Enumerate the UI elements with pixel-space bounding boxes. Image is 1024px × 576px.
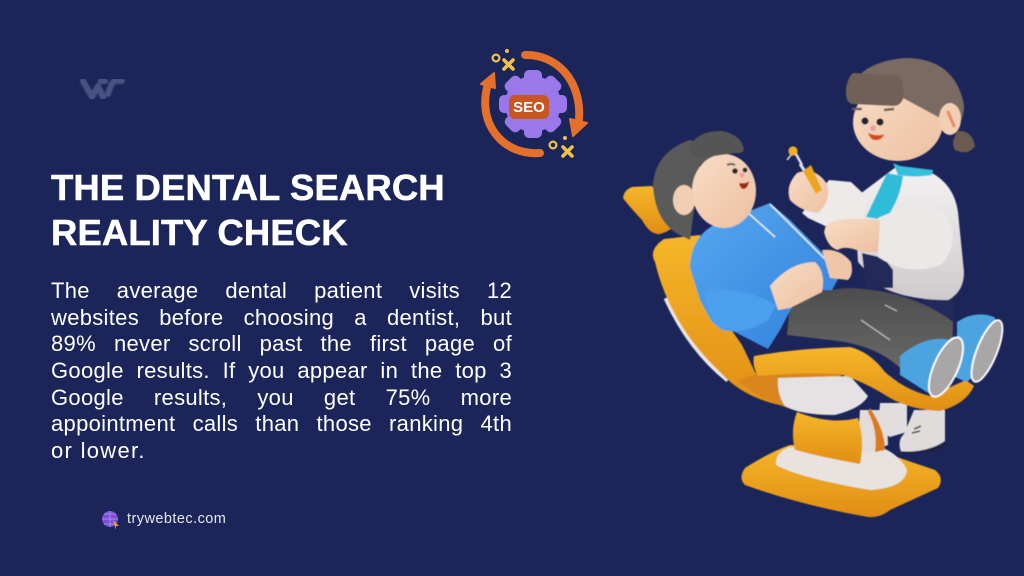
chair column and base bbox=[742, 376, 941, 517]
patient hands bbox=[770, 250, 852, 310]
arrow: clockwise top right bbox=[525, 55, 587, 136]
icon: faint WT logo bbox=[83, 81, 122, 97]
title: THE DENTAL SEARCH bbox=[51, 167, 445, 208]
illustration: dentist treating a patient bbox=[623, 58, 1009, 517]
dentist head bbox=[846, 58, 975, 161]
chair back and headrest bbox=[623, 186, 845, 412]
body text: The average dental patient visits 12 bbox=[51, 278, 512, 303]
website url: trywebtec.com bbox=[127, 511, 226, 527]
body text bbox=[51, 278, 512, 463]
SEO badge: SEO bbox=[513, 99, 545, 116]
body text: Google results, you get 75% more bbox=[51, 385, 512, 410]
patient head bbox=[653, 131, 756, 240]
dentist legs and shoes bbox=[878, 290, 954, 452]
body text: websites before choosing a dentist, but bbox=[51, 305, 512, 330]
icon: SEO gear with circular arrows bbox=[481, 49, 587, 156]
dentist lower arm bbox=[824, 207, 953, 270]
body text: appointment calls than those ranking 4th bbox=[51, 411, 512, 436]
chair seat bbox=[754, 347, 974, 411]
body text: Google results. If you appear in the top 3 bbox=[51, 358, 512, 383]
body text: or lower. bbox=[51, 438, 146, 463]
gear bbox=[499, 70, 567, 138]
arrow: clockwise bottom left bbox=[481, 73, 540, 153]
patient torso bbox=[690, 203, 842, 349]
patient pants and shoes bbox=[787, 288, 1009, 401]
body text: 89% never scroll past the first page of bbox=[51, 331, 512, 356]
title bbox=[51, 167, 445, 253]
dentist coat bbox=[856, 163, 964, 300]
icon: globe with cursor bbox=[102, 511, 119, 530]
sparkles bbox=[493, 49, 572, 156]
title: REALITY CHECK bbox=[51, 212, 348, 253]
dental tool and upper hand bbox=[787, 146, 868, 232]
